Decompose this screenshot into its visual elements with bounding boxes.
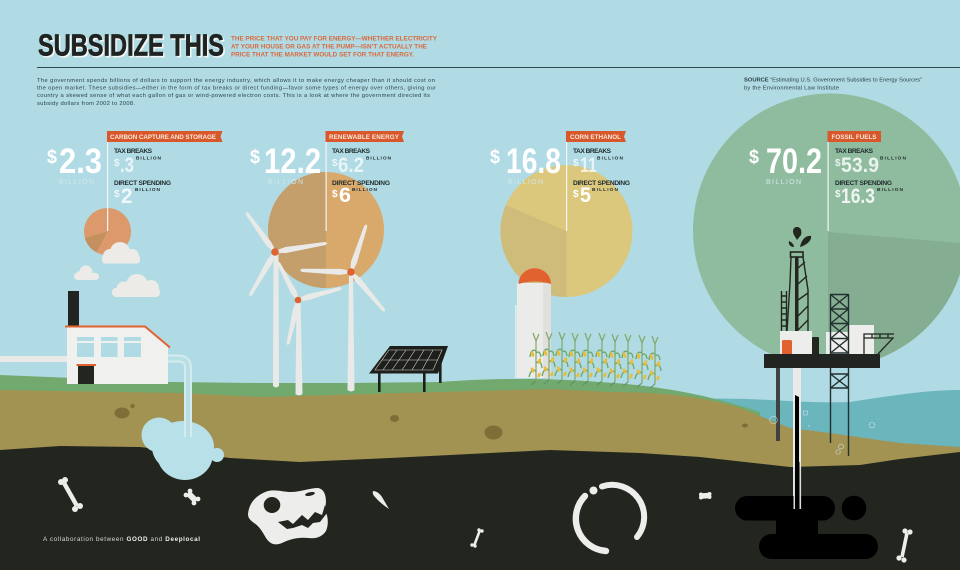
subheading: PRICE THAT THE MARKET WOULD SET FOR THAT ENERGY.	[231, 52, 414, 58]
drill pipe	[793, 368, 801, 509]
tax breaks: TAX BREAKS	[573, 148, 612, 155]
title: SUBSIDIZE THIS	[40, 29, 226, 64]
carbon injection pipe	[168, 358, 188, 437]
tax breaks: $	[114, 158, 120, 169]
tax breaks: BILLION	[597, 156, 624, 162]
pie chart: fossil fuels	[693, 94, 960, 368]
brown soil	[0, 389, 960, 480]
oil reservoir	[735, 496, 878, 559]
turbine 3	[300, 224, 387, 392]
skull nostril	[305, 491, 315, 497]
direct spending: BILLION	[135, 187, 161, 193]
credits: A collaboration between GOOD and Deeplocal	[43, 536, 200, 543]
intro text	[37, 78, 436, 107]
total	[250, 142, 321, 186]
tax breaks: BILLION	[366, 156, 392, 162]
banner: CARBON CAPTURE AND STORAGE	[110, 134, 216, 141]
direct spending: 16.3	[841, 185, 875, 208]
clouds	[74, 242, 160, 297]
tax breaks: 53.9	[841, 154, 879, 177]
direct spending: DIRECT SPENDING	[573, 180, 630, 187]
direct spending	[114, 180, 171, 208]
direct spending	[332, 180, 390, 207]
panel: corn ethanol	[490, 131, 630, 231]
banner: RENEWABLE ENERGY	[329, 134, 400, 141]
tax breaks: $	[835, 158, 841, 169]
banner: FOSSIL FUELS	[832, 134, 876, 141]
fossil: long bone	[896, 528, 913, 563]
total: 2.3	[59, 142, 102, 181]
total: $	[749, 147, 759, 168]
soil spots	[114, 404, 748, 440]
solar panel	[369, 346, 448, 392]
banner	[828, 131, 881, 142]
tax breaks: BILLION	[136, 156, 162, 162]
total: BILLION	[508, 179, 543, 186]
rig platform	[764, 354, 880, 368]
intro text: country a skewed sense of what each gallon of gas or wind-powered electron costs. This is a look at where the government directed its	[37, 93, 430, 99]
derrick	[782, 252, 808, 331]
oil gusher	[789, 227, 811, 247]
oil well pipe tip	[794, 462, 801, 509]
inlet pipe	[0, 356, 68, 362]
fossil: dinosaur skull	[248, 488, 328, 544]
carbon storage reservoir	[142, 418, 224, 480]
direct spending: BILLION	[352, 187, 378, 193]
pie chart: carbon capture	[84, 208, 131, 255]
factory with chimney	[0, 291, 170, 384]
tax breaks	[332, 148, 392, 177]
subheading: THE PRICE THAT YOU PAY FOR ENERGY—WHETHER ELECTRICITY	[231, 36, 438, 42]
subheading: AT YOUR HOUSE OR GAS AT THE PUMP—ISN’T ACTUALLY THE	[231, 44, 427, 50]
cloud 3	[112, 274, 160, 297]
tax breaks: $	[573, 158, 579, 169]
fossil: small bone	[470, 528, 484, 548]
skull jaw	[278, 505, 327, 529]
direct spending: $	[114, 189, 120, 200]
total: $	[490, 147, 500, 168]
tax breaks: .3	[120, 154, 134, 177]
banner: CORN ETHANOL	[570, 134, 621, 141]
fossil: bone 1	[58, 477, 83, 512]
source note	[744, 78, 922, 92]
total: 12.2	[264, 142, 321, 181]
tax breaks	[114, 148, 162, 177]
panel: renewable energy	[250, 131, 404, 231]
direct spending: $	[332, 189, 338, 200]
orange barrel	[782, 340, 792, 356]
direct spending: 6	[339, 184, 351, 207]
tax breaks: 6.2	[338, 154, 364, 177]
direct spending	[573, 180, 630, 207]
tax breaks: BILLION	[880, 156, 907, 162]
subheading	[231, 36, 438, 58]
fossil: tooth	[373, 491, 389, 509]
helipad arm	[864, 334, 894, 354]
total: BILLION	[59, 179, 94, 186]
total: 70.2	[766, 142, 822, 181]
rig buildings	[780, 331, 812, 355]
direct spending	[835, 180, 904, 208]
windows	[77, 337, 141, 357]
total: BILLION	[766, 179, 801, 186]
direct spending: $	[835, 189, 841, 200]
silo	[515, 268, 551, 378]
total	[47, 142, 102, 186]
tax breaks: TAX BREAKS	[114, 148, 153, 155]
turbine 1	[244, 211, 328, 388]
source note: SOURCE “Estimating U.S. Government Subsidies to Energy Sources”	[744, 78, 922, 84]
total: 16.8	[506, 142, 561, 181]
cloud 1	[102, 242, 140, 264]
banner	[107, 131, 222, 142]
tax breaks	[573, 148, 624, 177]
dark underground	[0, 446, 960, 570]
chimney	[68, 291, 79, 327]
direct spending: 5	[580, 184, 591, 207]
pie chart: corn ethanol	[500, 165, 632, 297]
skull eye socket	[264, 497, 280, 513]
title: SUBSIDIZE THIS	[38, 28, 224, 62]
factory roof	[65, 326, 170, 348]
direct spending: BILLION	[877, 187, 904, 193]
turbine 2	[275, 260, 342, 396]
total: BILLION	[268, 179, 303, 186]
truss tower	[830, 294, 848, 456]
intro text: subsidy dollars from 2002 to 2008.	[37, 101, 135, 107]
intro text: the open market. These subsidies—either in the form of tax breaks or direct funding—favor some types of energy over others, giving our	[37, 86, 436, 92]
total: $	[250, 147, 260, 168]
water	[700, 390, 960, 450]
rig leg	[776, 368, 780, 441]
panel: fossil fuels	[749, 131, 907, 231]
total: $	[47, 147, 57, 168]
tax breaks: TAX BREAKS	[332, 148, 371, 155]
total	[749, 142, 822, 186]
tax breaks	[835, 148, 907, 177]
direct spending: DIRECT SPENDING	[332, 180, 390, 187]
direct spending: 2	[121, 185, 132, 208]
direct spending: DIRECT SPENDING	[114, 180, 171, 187]
direct spending: $	[573, 189, 579, 200]
bubbles	[770, 411, 875, 454]
pie chart: renewable energy	[268, 172, 384, 288]
direct spending: BILLION	[592, 187, 619, 193]
total	[490, 142, 561, 186]
tax breaks: 11	[580, 154, 597, 177]
green ground	[0, 375, 760, 420]
corn field	[529, 332, 661, 388]
factory building	[67, 327, 168, 384]
banner	[326, 131, 404, 142]
direct spending: DIRECT SPENDING	[835, 180, 892, 187]
tax breaks: $	[332, 158, 338, 169]
source note: by the Environmental Law Institute	[744, 86, 839, 92]
tax breaks: TAX BREAKS	[835, 148, 874, 155]
offshore oil rig	[764, 227, 894, 509]
fossil: bone fragment	[699, 492, 712, 500]
door	[76, 364, 96, 384]
cloud 2	[74, 266, 99, 280]
fossil: rib ring	[576, 485, 644, 551]
panel: carbon capture and storage	[47, 131, 222, 231]
wind turbines	[244, 211, 387, 396]
fossil: bone 2	[184, 489, 200, 505]
intro text: The government spends billions of dollars to support the energy industry, which allows it to make energy cheaper than it should cost on	[37, 78, 435, 84]
